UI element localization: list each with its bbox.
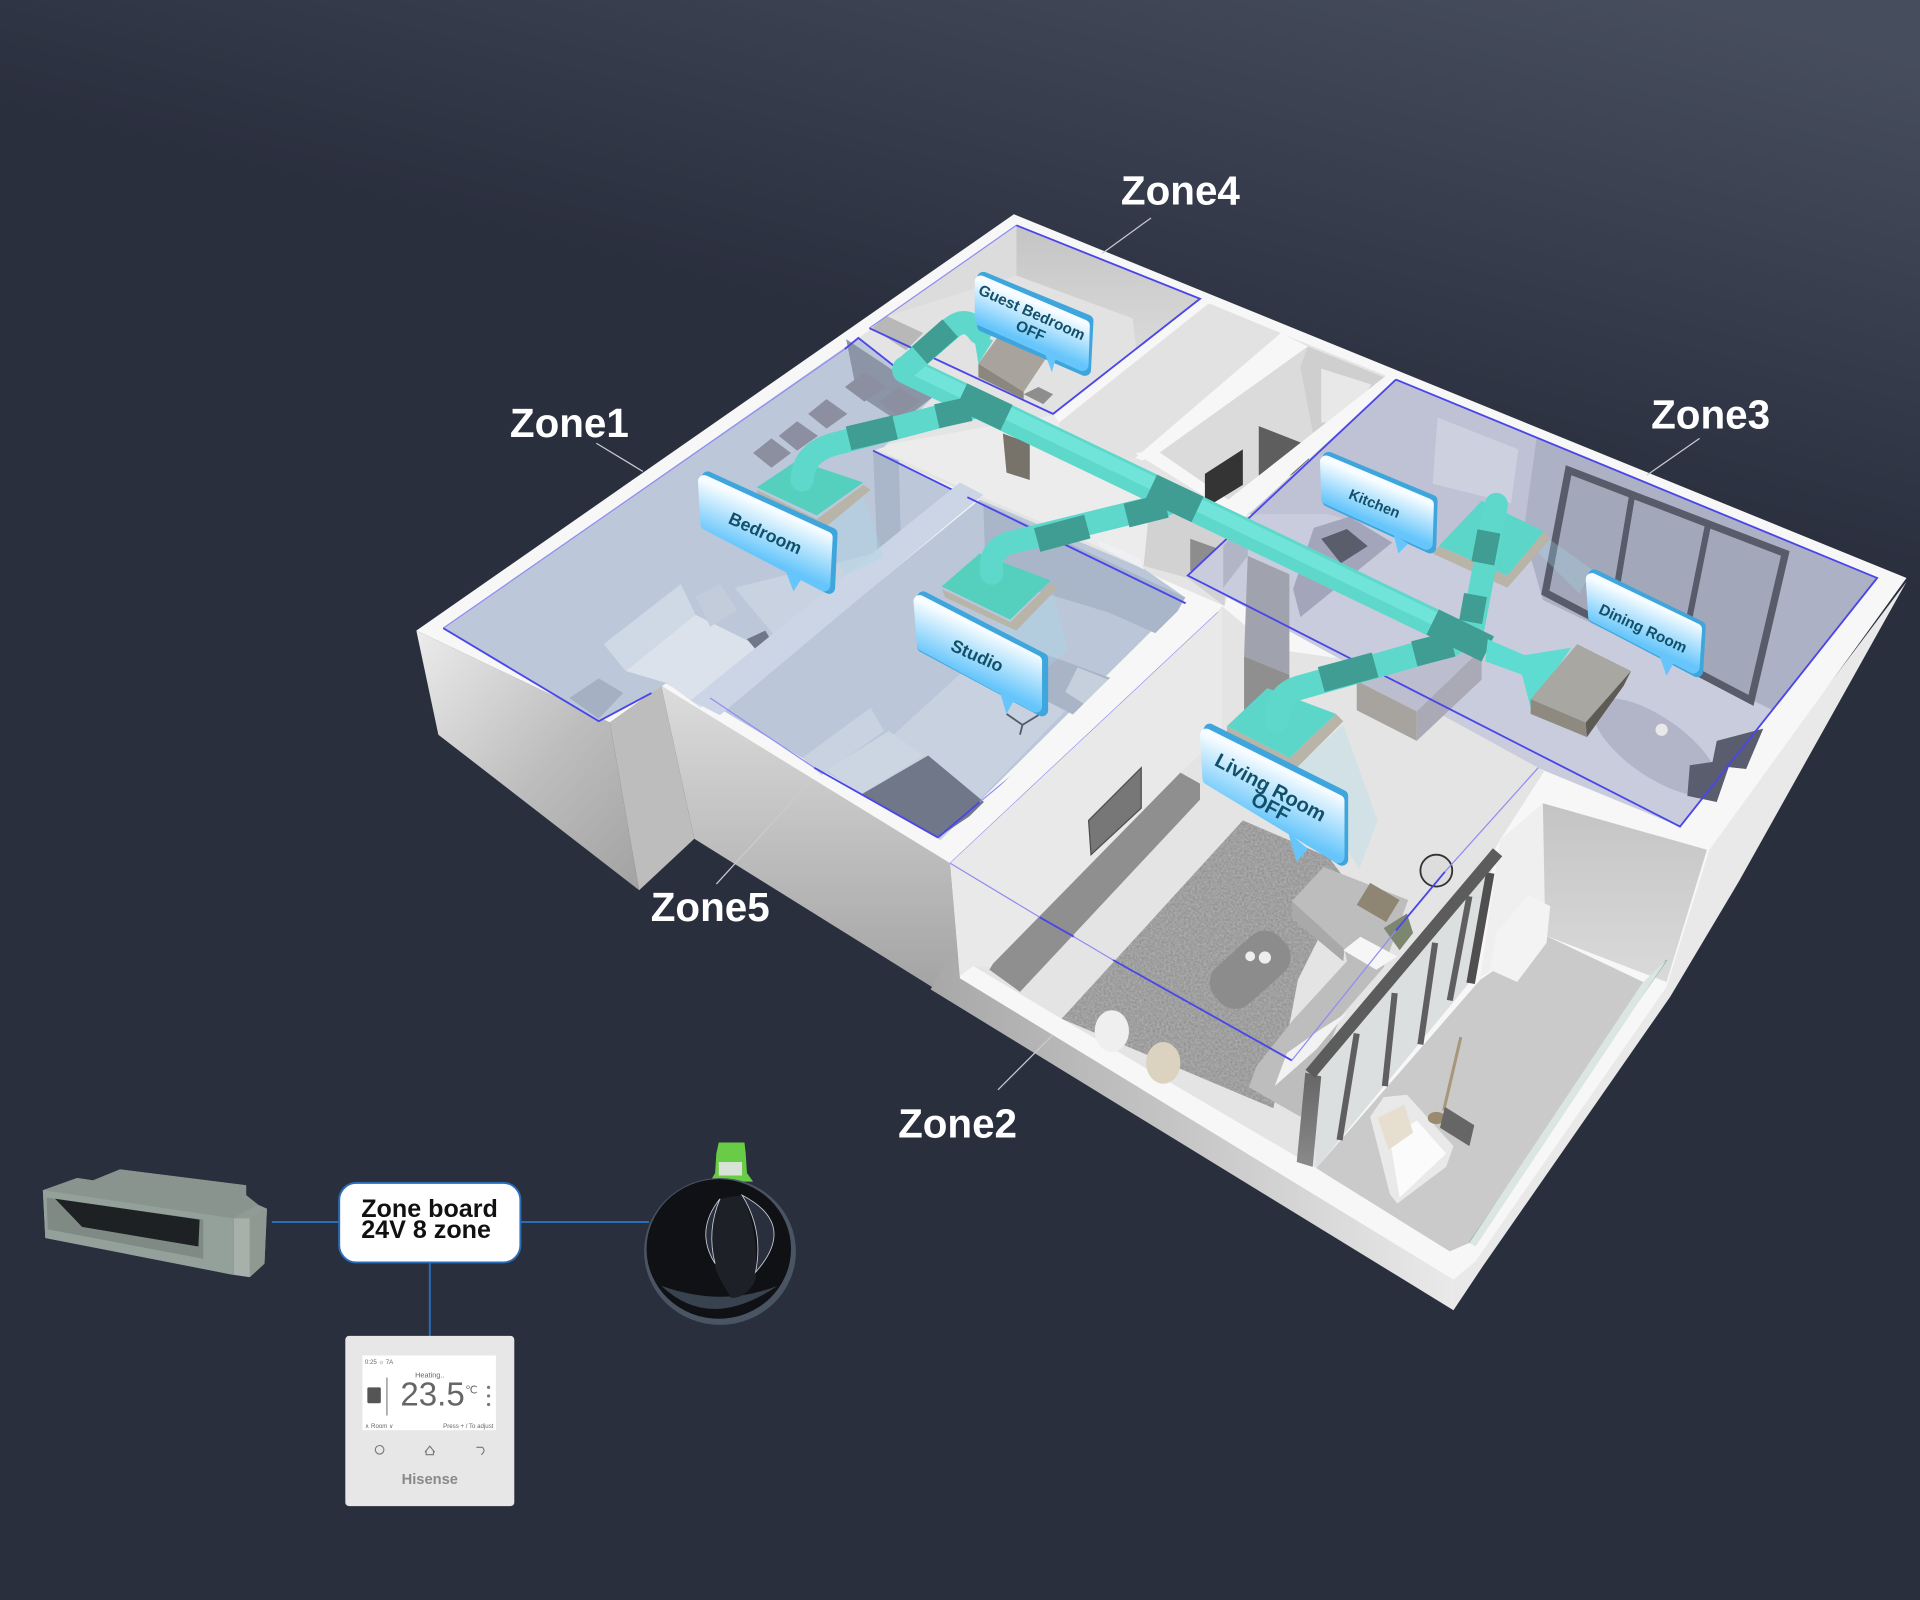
utility wall: [1144, 492, 1228, 606]
room: zone 2 living room: [950, 606, 1544, 1168]
stools: [1095, 1010, 1180, 1084]
icon: wall controller: Press + / To adjust: [443, 1423, 494, 1430]
label: Zone4: Zone4: [1121, 167, 1240, 213]
coffee table: [1201, 922, 1299, 1017]
label: Zone2: Zone2: [898, 1101, 1017, 1147]
speech bubble: dining room: [1592, 576, 1700, 676]
zone board: 24V 8 zone: [361, 1216, 491, 1244]
icon: wall controller: 23.5: [400, 1377, 465, 1414]
speech bubble: kitchen: [1326, 458, 1431, 553]
speech bubble: living room: OFF: [1247, 789, 1293, 827]
room: storage corridor: [1053, 298, 1281, 460]
doorway: [1003, 433, 1030, 480]
icon: wall controller: [345, 1336, 514, 1506]
heater rack: [1440, 1107, 1474, 1146]
icon: motorised damper: [644, 1142, 796, 1325]
speech bubble: guest bedroom: Guest Bedroom: [976, 282, 1087, 344]
label: Zone5: Zone5: [651, 884, 770, 930]
bed: [802, 708, 987, 838]
divider wall: [940, 600, 1222, 867]
label: Zone4: [1102, 167, 1240, 253]
wall tops: [416, 214, 1907, 1280]
speech bubble: kitchen: Kitchen: [1346, 487, 1402, 522]
icon: wall controller: Heating..: [415, 1371, 444, 1380]
icon: wall controller: 0:25 ☼ 7A: [365, 1359, 394, 1366]
kitchen window: [1433, 418, 1518, 503]
dining table: [1578, 681, 1733, 813]
label: Zone3: Zone3: [1651, 392, 1770, 438]
chairs: [1687, 729, 1763, 802]
room: zone 3 kitchen and dining: [1188, 380, 1877, 827]
kitchen counter: [1293, 517, 1392, 617]
label: Zone1: Zone1: [510, 400, 629, 446]
icon: wall controller: ∧ Room ∨: [365, 1423, 394, 1430]
branch: bedroom: [802, 408, 972, 480]
speech bubble: studio: [920, 598, 1042, 714]
icon: wall controller: ℃: [465, 1384, 478, 1396]
label: Zone5: [651, 784, 808, 930]
icon: wall controller: Hisense: [402, 1472, 458, 1488]
shelves: [753, 372, 921, 468]
television: [1089, 768, 1141, 855]
cabinets: [1223, 517, 1248, 588]
branch: studio: [991, 504, 1166, 573]
icon: ducted indoor unit: [43, 1169, 267, 1277]
kitchen column: [1244, 556, 1289, 675]
room: balcony: [1297, 803, 1707, 1251]
ducts: [802, 323, 1496, 720]
room: zone 1 bedroom: [443, 338, 967, 721]
glass rail: [1469, 960, 1667, 1247]
room: bathroom: [1157, 347, 1390, 511]
branch: guest bedroom: [906, 323, 980, 367]
speech bubble: guest bedroom: [976, 278, 1087, 372]
partition walls: [1135, 333, 1397, 520]
plenums: [757, 460, 1550, 768]
speech bubble: living room: [1206, 730, 1342, 862]
speech bubble: bedroom: [704, 478, 831, 591]
exterior walls: [416, 582, 1907, 1310]
zone board: [339, 1183, 520, 1262]
air streams: [820, 496, 1592, 869]
armchair: [1370, 1095, 1453, 1204]
storage shelves: [1205, 449, 1243, 508]
sofa: [1249, 867, 1413, 1117]
label: Zone3: [1647, 392, 1770, 475]
branch: kitchen: [1471, 504, 1496, 627]
sideboard: [989, 773, 1200, 992]
side table: [1420, 855, 1452, 887]
chair: [1007, 714, 1038, 735]
speech bubble: bedroom: Bedroom: [726, 508, 805, 558]
label: Zone1: [510, 400, 643, 471]
speech bubble: living room: Living Room: [1211, 750, 1329, 827]
sliding door: [1297, 852, 1498, 1168]
bed: [569, 584, 776, 719]
panel: system components: [43, 1142, 796, 1506]
air handling unit: [1485, 639, 1631, 737]
speech bubble: studio: Studio: [948, 635, 1007, 676]
tee joints: [961, 396, 1488, 649]
kitchen island: [1357, 643, 1482, 711]
guest bedroom fan coil: [973, 333, 1046, 399]
connector lines: [272, 1222, 649, 1336]
branch: living room: [1277, 644, 1452, 720]
window: [1545, 470, 1785, 700]
floor lamp: [1428, 1037, 1461, 1124]
zone board: Zone board: [361, 1195, 498, 1223]
main trunk: [906, 367, 1476, 643]
speech bubble: guest bedroom: OFF: [1013, 317, 1048, 345]
label: Zone2: [898, 1035, 1053, 1147]
desk: [1041, 654, 1112, 718]
outdoor unit: [1490, 895, 1550, 982]
core interior rooms: [858, 228, 1397, 606]
room: zone 5 studio: [691, 482, 1222, 867]
rug: [1062, 820, 1347, 1108]
panel: isometric floor plan: [416, 167, 1907, 1310]
speech bubble: dining room: Dining Room: [1596, 601, 1689, 657]
room: zone 4 guest bedroom: [869, 225, 1200, 414]
